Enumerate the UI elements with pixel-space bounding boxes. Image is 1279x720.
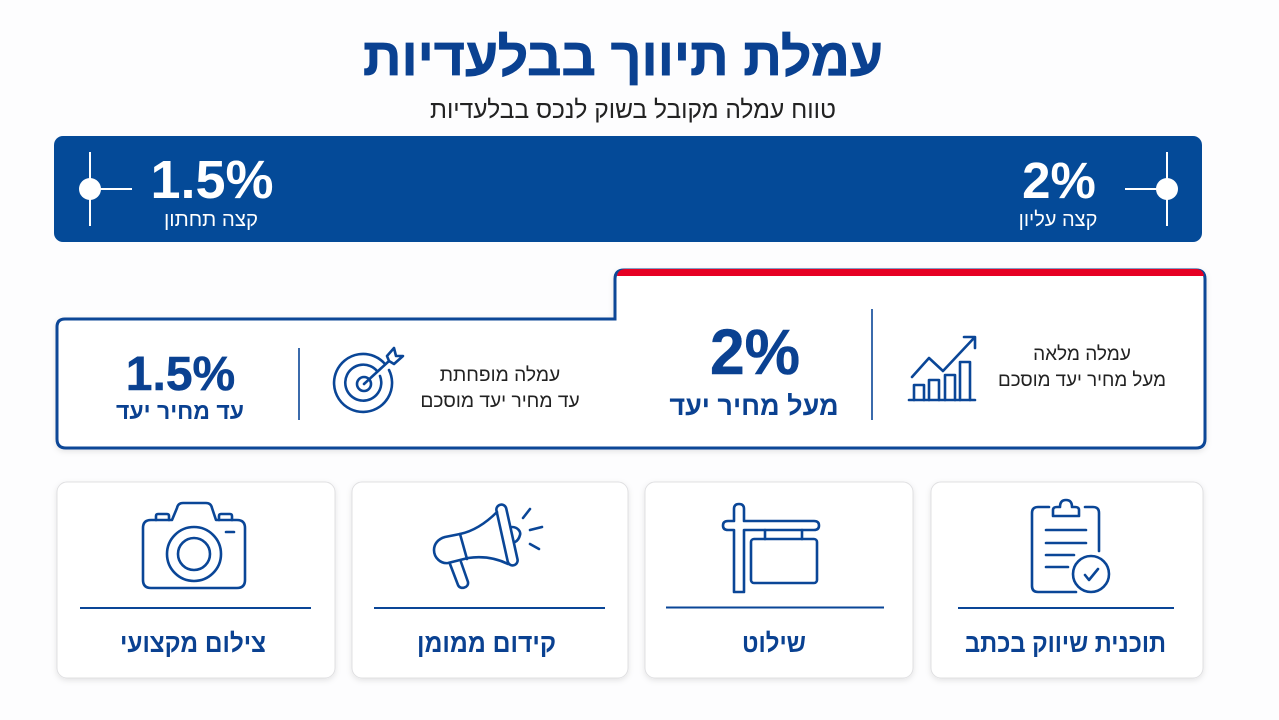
upper value: 2% [1022, 152, 1096, 209]
label: תוכנית שיווק בכתב [965, 628, 1166, 658]
full label: מעל מחיר יעד [669, 391, 839, 421]
lower value: 1.5% [150, 150, 274, 210]
label: שילוט [742, 628, 806, 658]
icon: camera [143, 503, 245, 588]
icon: target [334, 348, 403, 412]
card: written marketing plan [931, 482, 1203, 678]
full description: עמלה מלאה [1033, 344, 1131, 365]
card: sign [645, 482, 913, 678]
icon: clipboard [1032, 500, 1109, 592]
icon: megaphone [434, 504, 542, 588]
panel: commission range bar [54, 136, 1202, 242]
icon: hanging sign [723, 504, 819, 592]
icon: upper marker [1125, 152, 1178, 226]
full value: 2% [710, 316, 800, 388]
upper label: קצה עליון [1019, 209, 1097, 231]
label: צילום מקצועי [120, 628, 266, 658]
reduced description [420, 365, 580, 412]
card: professional photography [57, 482, 335, 678]
full description: מעל מחיר יעד מוסכם [998, 370, 1166, 391]
divider [871, 309, 873, 420]
label: קידום ממומן [417, 628, 556, 658]
lower label: קצה תחתון [164, 209, 258, 231]
reduced label: עד מחיר יעד [116, 398, 244, 424]
full description [998, 344, 1166, 391]
icon: rising chart [909, 337, 975, 400]
card: professional promotion [352, 482, 628, 678]
title: עמלת תיווך בבלעדיות [363, 28, 883, 87]
red accent [617, 269, 1204, 276]
reduced value: 1.5% [126, 348, 235, 401]
reduced description: עמלה מופחתת [440, 365, 560, 386]
panel: commission tiers [57, 269, 1205, 448]
icon: lower marker [79, 152, 132, 226]
divider [298, 348, 300, 420]
reduced description: עד מחיר יעד מוסכם [420, 391, 580, 412]
subtitle: טווח עמלה מקובל בשוק לנכס בבלעדיות [430, 96, 836, 124]
